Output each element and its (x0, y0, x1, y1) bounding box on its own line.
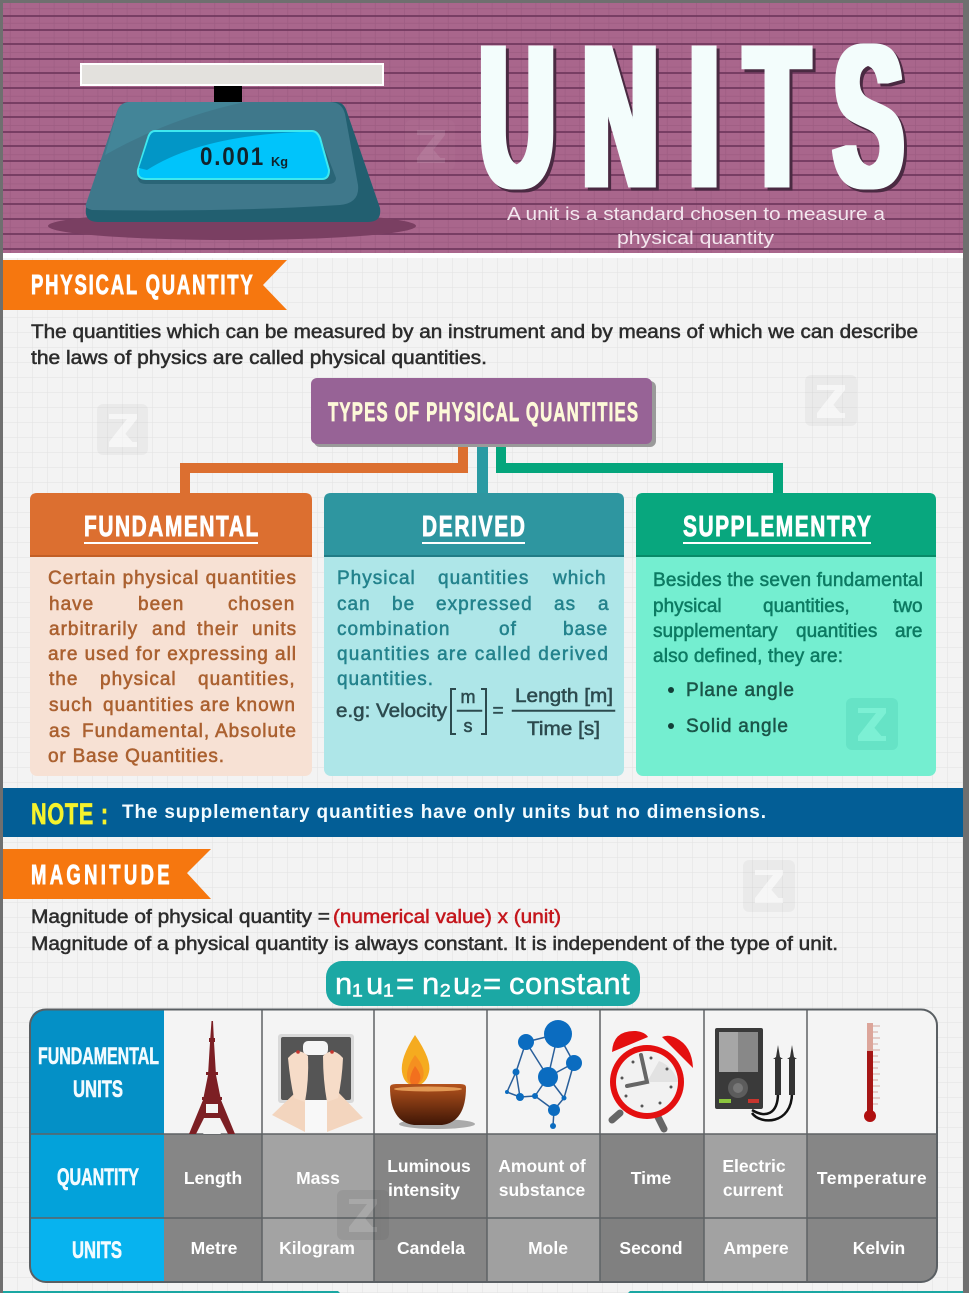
section tab: magnitude: MAGNITUDE (31, 860, 170, 891)
panel: fundamental: as (49, 721, 71, 742)
note bar: The supplementary quantities have only units but no dimensions. (122, 802, 766, 823)
intro text (31, 322, 918, 369)
icon: multimeter (715, 1028, 797, 1120)
panel: fundamental: or Base Quantities. (48, 746, 224, 767)
panel: supplementry: Plane angle (686, 680, 794, 701)
panel: fundamental: been (138, 594, 184, 615)
watermark (337, 1190, 389, 1240)
title: N (583, 3, 658, 231)
intro text: The quantities which can be measured by an instrument and by means of which we can describe (31, 322, 918, 343)
panel: fundamental: have (49, 594, 94, 615)
quantity row: current (723, 1180, 783, 1200)
section tab: physical quantity: PHYSICAL QUANTITY (31, 270, 253, 301)
types of physical quantities box (311, 378, 656, 447)
quantity row: Temperature (817, 1168, 927, 1188)
magnitude text: Magnitude of physical quantity = (31, 907, 330, 928)
title: S (834, 3, 903, 231)
formula pill: u₂ (453, 966, 482, 1001)
units row: Kelvin (853, 1238, 905, 1258)
panel: derived: quantities. (337, 669, 433, 690)
panel: fundamental: arbitrarily (49, 619, 138, 640)
panel: derived: base (563, 619, 608, 640)
velocity formula: = (492, 701, 504, 722)
magnitude text: Magnitude of a physical quantity is always constant. It is independent of the type of unit. (31, 934, 838, 955)
panel: fundamental: Fundamental, (82, 721, 210, 742)
subtitle: A unit is a standard chosen to measure a (507, 203, 886, 224)
formula pill: = (396, 966, 414, 1001)
quantity row: Luminous (387, 1156, 471, 1176)
icon: digital weighing scale: 0.001 (200, 143, 265, 171)
table cells (30, 1009, 937, 1282)
panel: fundamental (30, 493, 312, 776)
row label: quantity: QUANTITY (57, 1164, 139, 1191)
panel: fundamental: units (252, 619, 297, 640)
title: U (480, 3, 555, 231)
formula pill: = (483, 966, 501, 1001)
panel: supplementry: quantities, (763, 596, 850, 617)
formula pill: constant (509, 966, 630, 1001)
icon: bathroom scale with feet (272, 1034, 363, 1132)
panel: fundamental: Absolute (215, 721, 297, 742)
icon: eiffel tower (189, 1021, 235, 1134)
panel: fundamental: FUNDAMENTAL (84, 511, 258, 543)
intro text: the laws of physics are called physical quantities. (31, 348, 487, 369)
panel: fundamental: their (197, 619, 239, 640)
units row (191, 1238, 905, 1258)
panel: derived: which (552, 568, 607, 589)
panel: supplementry: supplementary (653, 621, 778, 642)
section tab: magnitude (3, 849, 211, 899)
row label: fundamental units: FUNDAMENTAL (38, 1043, 159, 1070)
icon: alarm clock (610, 1031, 693, 1129)
quantity row: Length (184, 1168, 242, 1188)
panel: fundamental: quantities (103, 695, 194, 716)
icon: digital weighing scale (48, 63, 416, 240)
formula pill: n₂ (422, 966, 451, 1001)
units row: Ampere (723, 1238, 789, 1258)
velocity formula: m (460, 687, 476, 707)
velocity formula (336, 686, 615, 740)
row label: fundamental units: UNITS (73, 1076, 123, 1103)
title: I (690, 3, 719, 231)
panel: supplementry: Besides the seven fundamental (653, 570, 923, 591)
note bar: NOTE : (31, 796, 108, 831)
panel: supplementry (636, 493, 936, 776)
panel: derived: Physical (337, 568, 416, 589)
velocity formula: Length [m] (515, 686, 613, 707)
title (480, 3, 903, 231)
velocity formula: Time [s] (527, 719, 600, 740)
panel: derived (324, 493, 624, 776)
panel: fundamental: are used for expressing all (48, 644, 296, 665)
panel: fundamental: quantities, (198, 669, 296, 690)
subtitle (507, 203, 886, 248)
panel: derived: combination (337, 619, 450, 640)
panel: derived: quantities (438, 568, 529, 589)
fundamental units table (30, 1009, 937, 1282)
units row: Candela (397, 1238, 465, 1258)
panel: fundamental: and (152, 619, 187, 640)
panel: supplementry: quantities (796, 621, 877, 642)
panel: fundamental: are (200, 695, 230, 716)
formula pill: u₁ (366, 966, 394, 1001)
formula pill: n₁ (335, 966, 363, 1001)
quantity row: substance (499, 1180, 586, 1200)
panel: derived: expressed (436, 594, 533, 615)
panel: derived: a (598, 594, 610, 615)
panel: fundamental: the (49, 669, 78, 690)
panel: fundamental: chosen (228, 594, 295, 615)
icon: thermometer (864, 1023, 880, 1122)
quantity row (184, 1156, 927, 1200)
velocity formula: s (464, 716, 472, 736)
icon: molecule network (505, 1020, 582, 1129)
units row: Kilogram (279, 1238, 355, 1258)
panel: fundamental: physical (100, 669, 177, 690)
quantity row: Mass (296, 1168, 340, 1188)
panel: supplementry: also defined, they are: (653, 646, 843, 667)
connectors (185, 444, 778, 493)
velocity formula: e.g: Velocity (336, 701, 448, 722)
panel: supplementry: SUPPLEMENTRY (683, 511, 871, 543)
quantity row: intensity (388, 1180, 460, 1200)
panel: derived: of (499, 619, 517, 640)
panel: supplementry: two (893, 596, 923, 617)
panel: fundamental: known (236, 695, 296, 716)
panel: fundamental: such (49, 695, 93, 716)
icon: digital weighing scale: Kg (271, 154, 288, 169)
units row: Second (619, 1238, 683, 1258)
panel: derived: can (337, 594, 371, 615)
watermarks (97, 120, 857, 912)
panel: derived: DERIVED (422, 511, 525, 543)
panel: supplementry: physical (653, 596, 722, 617)
watermark (846, 698, 898, 750)
units row: Metre (191, 1238, 238, 1258)
types of physical quantities box: TYPES OF PHYSICAL QUANTITIES (328, 397, 638, 427)
panel: derived: be (392, 594, 415, 615)
panel: supplementry: are (895, 621, 922, 642)
subtitle: physical quantity (617, 227, 775, 248)
units row: Mole (528, 1238, 568, 1258)
row label: units: UNITS (72, 1237, 122, 1264)
quantity row: Amount of (498, 1156, 586, 1176)
magnitude text (31, 907, 838, 955)
panel: fundamental: Certain physical quantities (48, 568, 296, 589)
title: T (745, 3, 809, 231)
section tab: physical quantity (3, 260, 287, 310)
header banner (3, 3, 963, 253)
quantity row: Time (631, 1168, 672, 1188)
magnitude text: (numerical value) x (unit) (333, 907, 561, 928)
formula pill (326, 961, 640, 1006)
panel: derived: as (554, 594, 576, 615)
row label: fundamental units (38, 1043, 159, 1103)
next section edges (3, 1291, 963, 1293)
panel: derived: quantities are called derived (337, 644, 608, 665)
note bar (3, 788, 963, 837)
quantity row: Electric (722, 1156, 786, 1176)
icon: oil lamp (390, 1035, 475, 1129)
panel: supplementry: Solid angle (686, 716, 788, 737)
